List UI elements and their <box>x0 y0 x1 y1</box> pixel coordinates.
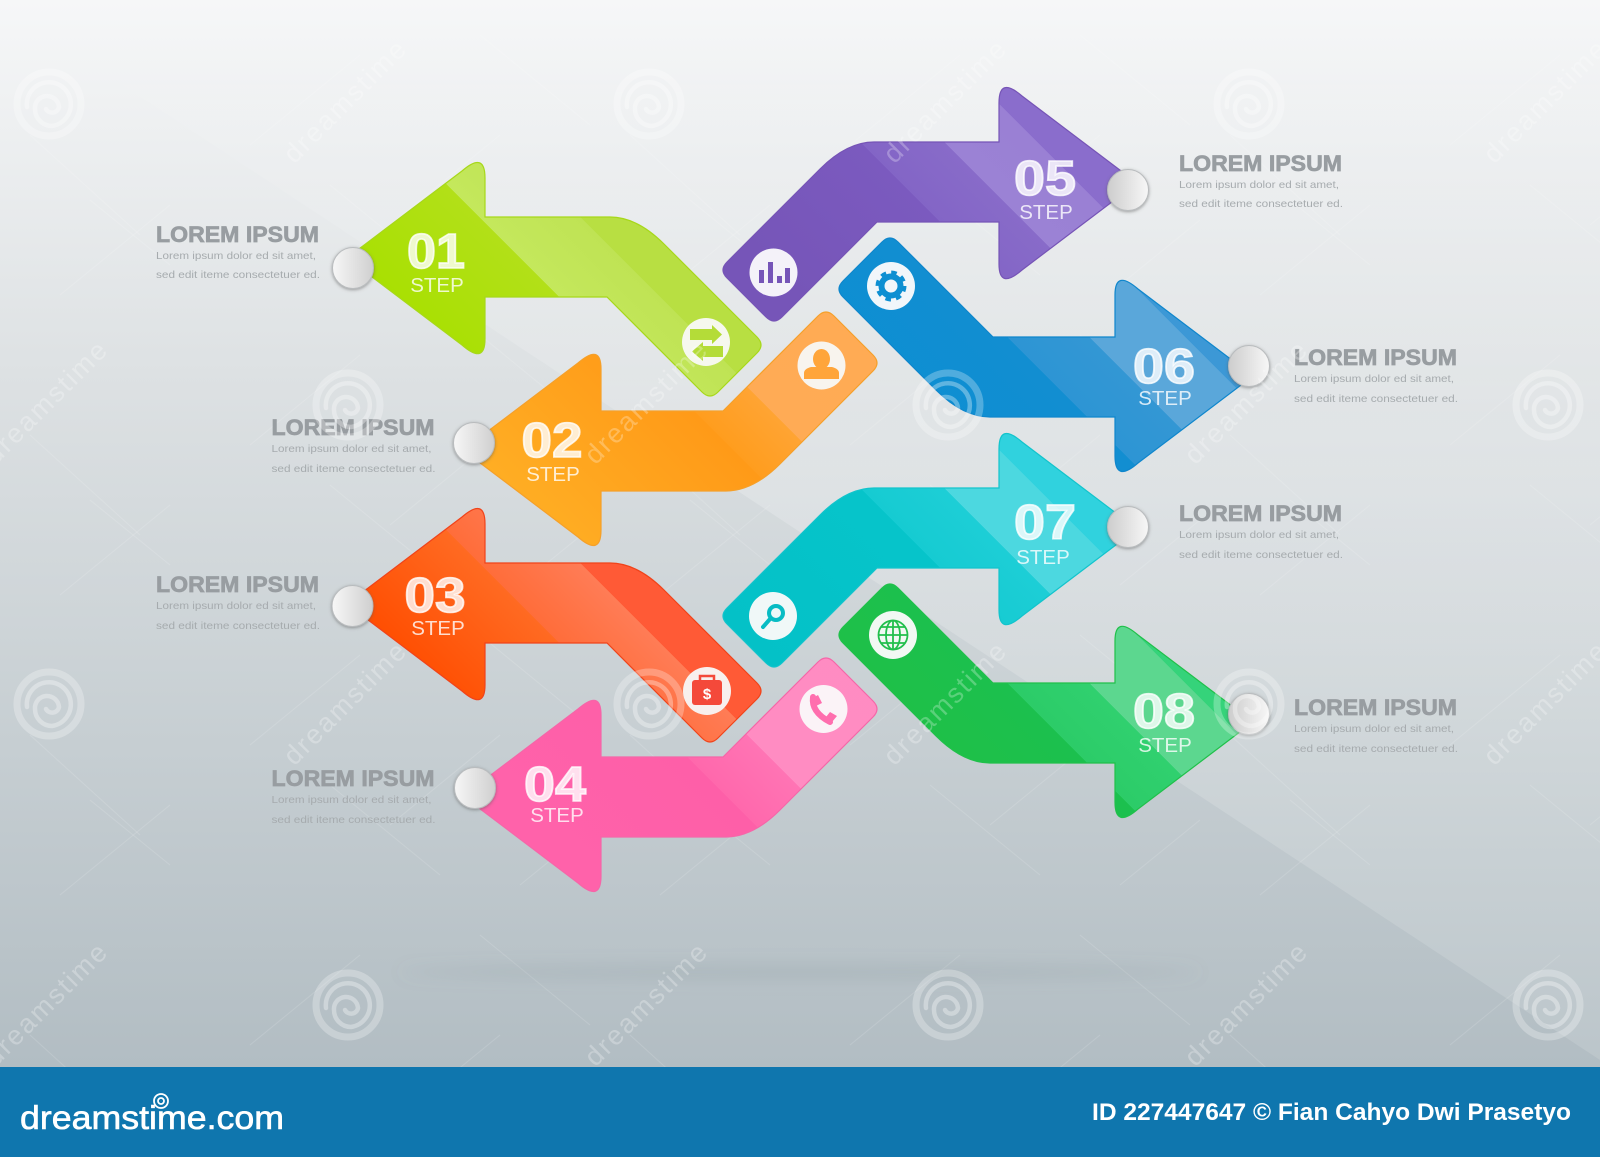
icon: gear <box>867 262 915 310</box>
step label 06: STEP <box>1138 387 1192 410</box>
watermark text: dreamstime <box>277 34 412 169</box>
number 05: 05 <box>1014 152 1076 206</box>
text block 07: LOREM IPSUM <box>1179 501 1342 526</box>
floor shadow <box>400 965 1200 979</box>
text block 06: sed edit iteme consectetuer ed. <box>1294 393 1458 405</box>
footer banner <box>0 1067 1600 1157</box>
text block 03 <box>156 572 320 632</box>
number 06: 06 <box>1133 340 1195 394</box>
icon: person <box>798 342 846 390</box>
watermark text: dreamstime <box>578 335 713 470</box>
number 02: 02 <box>522 414 582 468</box>
arrow 01 <box>347 162 761 396</box>
text block 04: Lorem ipsum dolor ed sit amet, <box>272 794 432 806</box>
text block 05: sed edit iteme consectetuer ed. <box>1179 198 1343 210</box>
step label 07: STEP <box>1016 546 1070 569</box>
text block 08 <box>1294 695 1458 755</box>
text block 02: sed edit iteme consectetuer ed. <box>272 463 436 475</box>
arrow 04 <box>463 658 877 892</box>
text block 01: sed edit iteme consectetuer ed. <box>156 269 320 281</box>
text block 02 <box>272 415 436 475</box>
icon: magnifier <box>749 592 797 640</box>
watermark text: dreamstime <box>877 34 1012 169</box>
arrow 02 <box>463 312 877 546</box>
text block 05 <box>1179 151 1343 210</box>
text block 07: sed edit iteme consectetuer ed. <box>1179 549 1343 561</box>
connector dots <box>332 170 1270 808</box>
image id and credit: ID 227447647 © Fian Cahyo Dwi Prasetyo <box>1092 1099 1571 1126</box>
text block 06: Lorem ipsum dolor ed sit amet, <box>1294 373 1454 385</box>
text block 07: Lorem ipsum dolor ed sit amet, <box>1179 529 1339 541</box>
icon: bar chart <box>750 248 798 296</box>
icon: dreamstime swirl <box>154 1094 168 1108</box>
number 08: 08 <box>1133 685 1195 739</box>
text block 02: LOREM IPSUM <box>272 415 434 440</box>
watermark text: dreamstime <box>1178 335 1313 470</box>
text block 06 <box>1294 345 1458 405</box>
icon: phone <box>800 685 848 733</box>
arrow 05 <box>723 87 1137 321</box>
text block 01: Lorem ipsum dolor ed sit amet, <box>156 250 316 262</box>
watermark text: dreamstime <box>277 636 412 771</box>
number 04: 04 <box>524 758 586 812</box>
text block 03: LOREM IPSUM <box>156 572 319 597</box>
watermark text: dreamstime <box>578 937 713 1072</box>
arrow 03 <box>347 508 761 742</box>
text block 07 <box>1179 501 1343 561</box>
number 07: 07 <box>1014 496 1076 550</box>
text block 05: LOREM IPSUM <box>1179 151 1342 176</box>
text block 01: LOREM IPSUM <box>156 222 319 247</box>
text block 03: sed edit iteme consectetuer ed. <box>156 620 320 632</box>
text block 04 <box>272 766 436 826</box>
number 01: 01 <box>407 225 465 279</box>
text block 06: LOREM IPSUM <box>1294 345 1457 370</box>
watermark text: dreamstime <box>1178 937 1313 1072</box>
step label 05: STEP <box>1019 201 1073 224</box>
arrow 08 <box>839 584 1253 818</box>
logo text: dreamstime.com <box>20 1099 284 1136</box>
text block 04: LOREM IPSUM <box>272 766 434 791</box>
text block 01 <box>156 222 320 281</box>
step label 02: STEP <box>526 463 580 486</box>
icon: swap arrows <box>682 318 730 366</box>
text block 08: sed edit iteme consectetuer ed. <box>1294 743 1458 755</box>
arrow 07 <box>723 433 1137 667</box>
text block 05: Lorem ipsum dolor ed sit amet, <box>1179 179 1339 191</box>
step label 08: STEP <box>1138 734 1192 757</box>
text block 08: Lorem ipsum dolor ed sit amet, <box>1294 723 1454 735</box>
text block 03: Lorem ipsum dolor ed sit amet, <box>156 600 316 612</box>
icon: globe <box>869 611 917 659</box>
watermark text: dreamstime <box>877 636 1012 771</box>
number 03: 03 <box>404 569 466 623</box>
icon: money briefcase: $ <box>703 686 712 703</box>
step label 04: STEP <box>530 804 584 827</box>
icon: money briefcase <box>683 667 731 715</box>
text block 04: sed edit iteme consectetuer ed. <box>272 814 436 826</box>
step label 03: STEP <box>411 617 465 640</box>
arrow 06 <box>839 238 1253 472</box>
text block 02: Lorem ipsum dolor ed sit amet, <box>272 443 432 455</box>
text block 08: LOREM IPSUM <box>1294 695 1457 720</box>
step label 01: STEP <box>410 274 464 297</box>
